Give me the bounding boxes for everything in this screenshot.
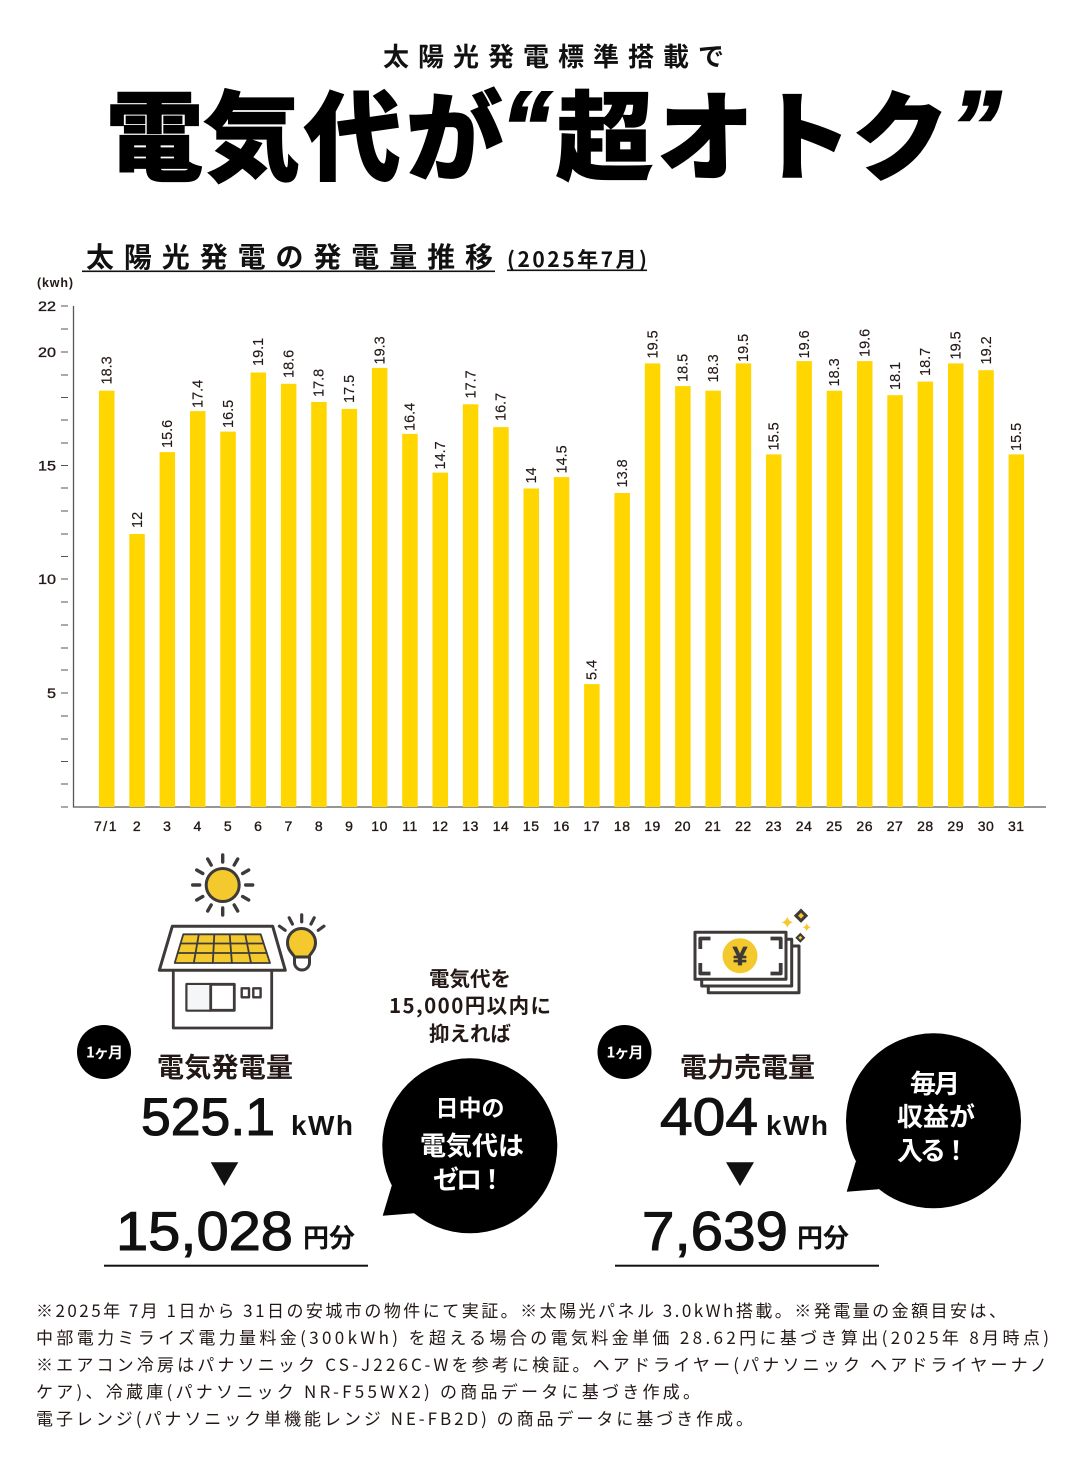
value: yen saved: 円分 — [303, 1218, 355, 1255]
bar value labels: 17.7 — [463, 370, 479, 398]
bar value labels: 5.4 — [585, 660, 601, 680]
badge: one month — [598, 1025, 652, 1079]
x axis labels: 20 — [675, 818, 691, 834]
icon: solar panel — [175, 934, 270, 963]
bar value labels: 18.3 — [706, 354, 722, 382]
x axis labels: 30 — [978, 818, 994, 834]
bar value labels: 18.6 — [281, 350, 297, 378]
value: yen saved: 15,028 — [116, 1200, 293, 1262]
bar value labels: 17.4 — [190, 380, 206, 408]
callout: monthly income: 収益が — [897, 1097, 975, 1134]
badge: one month — [77, 1025, 131, 1079]
badge: one month: 1ヶ月 — [86, 1042, 123, 1062]
x axis labels: 7/1 — [94, 818, 117, 834]
bar value labels: 14.7 — [433, 441, 449, 470]
x axis labels: 18 — [614, 818, 630, 834]
callout: zero electricity cost: ゼロ！ — [433, 1160, 505, 1197]
x axis labels: 31 — [1008, 818, 1025, 834]
bar value labels — [100, 329, 1025, 680]
arrow — [211, 1162, 238, 1186]
x axis labels: 21 — [705, 818, 721, 834]
x axis labels: 5 — [224, 818, 232, 834]
value: kWh generated: kWh — [291, 1110, 353, 1141]
arrow — [726, 1162, 754, 1186]
text: condition: 15,000円以内に — [389, 989, 551, 1019]
value: kWh sold: kWh — [766, 1110, 828, 1141]
bar value labels: 12 — [130, 512, 146, 528]
x axis labels: 11 — [402, 818, 418, 834]
bar value labels: 19.1 — [251, 338, 267, 366]
callout: monthly income: 毎月 — [910, 1064, 960, 1101]
y axis labels: 5 — [47, 685, 56, 701]
bar value labels: 16.7 — [494, 393, 510, 421]
subtitle: 太陽光発電標準搭載で — [383, 37, 724, 74]
x axis labels: 29 — [947, 818, 964, 834]
bar value labels: 18.1 — [888, 362, 904, 390]
bar value labels: 16.4 — [403, 403, 419, 431]
bar value labels: 19.5 — [736, 334, 752, 362]
main title: ” — [951, 71, 1001, 183]
x axis labels: 6 — [254, 818, 262, 834]
value: kWh sold: 404 — [660, 1088, 758, 1147]
bar chart — [37, 276, 1046, 834]
footnotes — [36, 1297, 1049, 1430]
x axis labels: 16 — [553, 818, 570, 834]
x axis labels: 12 — [432, 818, 449, 834]
callout: monthly income: 入る！ — [897, 1131, 969, 1168]
panel: selling — [598, 1025, 879, 1267]
bar value labels: 19.5 — [948, 331, 964, 360]
icon: sparkles — [782, 908, 811, 943]
footnotes: ※エアコン冷房はパナソニック CS-J226C-Wを参考に検証。ヘアドライヤー(パナソニック ヘアドライヤーナノ — [36, 1351, 1047, 1376]
value: kWh generated: 525.1 — [141, 1088, 275, 1147]
icon: back notes — [702, 939, 799, 993]
main title: 超オトク — [556, 60, 949, 200]
heading: generation: 電気発電量 — [157, 1046, 293, 1085]
x axis labels: 4 — [194, 818, 202, 834]
bar value labels: 18.5 — [676, 354, 692, 382]
y axis ticks — [61, 306, 68, 807]
icon: sun, solar house and light bulb — [159, 855, 324, 1028]
bars — [99, 361, 1024, 807]
icon: sun — [193, 855, 253, 915]
callout: zero electricity cost — [382, 1058, 557, 1233]
x axis labels: 10 — [371, 818, 388, 834]
bar value labels: 15.6 — [160, 420, 176, 448]
x axis labels — [94, 818, 1025, 834]
value: kWh generated — [141, 1088, 353, 1147]
footnotes: 電子レンジ(パナソニック単機能レンジ NE-FB2D) の商品データに基づき作成。 — [36, 1405, 753, 1430]
text: condition: 電気代を — [429, 962, 511, 992]
x axis labels: 15 — [523, 818, 539, 834]
x axis labels: 17 — [584, 818, 600, 834]
x axis labels: 25 — [826, 818, 843, 834]
chart heading: (2025年7月) — [507, 244, 647, 274]
bar value labels: 18.7 — [918, 348, 934, 376]
bar value labels: 19.2 — [979, 336, 995, 364]
icon: light bulb — [279, 915, 324, 970]
callout: zero electricity cost: 日中の — [436, 1089, 504, 1123]
y axis labels: 15 — [38, 458, 56, 474]
x axis labels: 9 — [345, 818, 353, 834]
bar value labels: 13.8 — [615, 459, 631, 488]
bar value labels: 19.3 — [372, 336, 388, 364]
callout: monthly income — [846, 1033, 1021, 1208]
footnotes: 中部電力ミライズ電力量料金(300kWh) を超える場合の電気料金単価 28.62円に基づき算出(2025年 8月時点) — [36, 1324, 1049, 1349]
bar value labels: 16.5 — [221, 400, 237, 428]
y axis labels: 10 — [38, 571, 56, 587]
x axis labels: 23 — [766, 818, 782, 834]
icon: note corner marks — [700, 938, 781, 974]
x axis labels: 2 — [133, 818, 141, 834]
y axis labels — [38, 298, 56, 701]
value: yen earned: 7,639 — [642, 1200, 788, 1262]
heading: selling: 電力売電量 — [680, 1046, 815, 1085]
x axis labels: 13 — [462, 818, 479, 834]
x axis labels: 8 — [315, 818, 323, 834]
x axis labels: 22 — [735, 818, 752, 834]
callout: zero electricity cost: 電気代は — [420, 1126, 524, 1163]
value: yen earned: 円分 — [797, 1218, 849, 1255]
x axis labels: 27 — [887, 818, 903, 834]
bar value labels: 19.6 — [858, 329, 874, 357]
x axis labels: 24 — [796, 818, 812, 834]
text: condition: 抑えれば — [429, 1017, 511, 1047]
footnotes: ケア)、冷蔵庫(パナソニック NR-F55WX2) の商品データに基づき作成。 — [36, 1378, 700, 1403]
axes — [74, 306, 1046, 807]
x axis labels: 7 — [284, 818, 293, 834]
y axis labels: 20 — [38, 344, 56, 360]
icon: house body — [173, 970, 272, 1028]
main title: 電気代が — [106, 60, 503, 200]
bar value labels: 14.5 — [554, 445, 570, 474]
y axis labels: 22 — [38, 298, 56, 314]
x axis labels: 26 — [856, 818, 873, 834]
bar value labels: 18.3 — [100, 356, 116, 384]
bar value labels: 15.5 — [766, 422, 782, 450]
x axis labels: 3 — [163, 818, 171, 834]
badge: one month: 1ヶ月 — [606, 1042, 644, 1062]
chart heading: 太陽光発電の発電量推移 — [86, 236, 493, 276]
bar value labels: 19.5 — [645, 330, 661, 358]
y axis unit: (kwh) — [37, 276, 73, 290]
icon: roof — [159, 926, 285, 970]
bar value labels: 15.5 — [1009, 423, 1025, 451]
x axis labels: 28 — [917, 818, 934, 834]
bar value labels: 19.6 — [797, 330, 813, 358]
x axis labels: 19 — [644, 818, 661, 834]
x axis labels: 14 — [493, 818, 509, 834]
value: kWh sold — [660, 1088, 828, 1147]
footnotes: ※2025年 7月 1日から 31日の安城市の物件にて実証。※太陽光パネル 3.0kWh搭載。※発電量の金額目安は、 — [36, 1297, 1006, 1322]
bar value labels: 18.3 — [827, 358, 843, 386]
text: condition — [389, 962, 551, 1047]
icon: yen coin: ¥ — [733, 941, 748, 971]
bar value labels: 17.8 — [312, 369, 328, 397]
panel: generation — [77, 1025, 368, 1267]
value: yen earned — [642, 1200, 849, 1262]
main title: “ — [501, 71, 551, 183]
icon: banknotes — [695, 908, 811, 993]
icon: front note — [695, 932, 786, 979]
bar value labels: 14 — [524, 467, 540, 484]
bar value labels: 17.5 — [342, 375, 358, 403]
